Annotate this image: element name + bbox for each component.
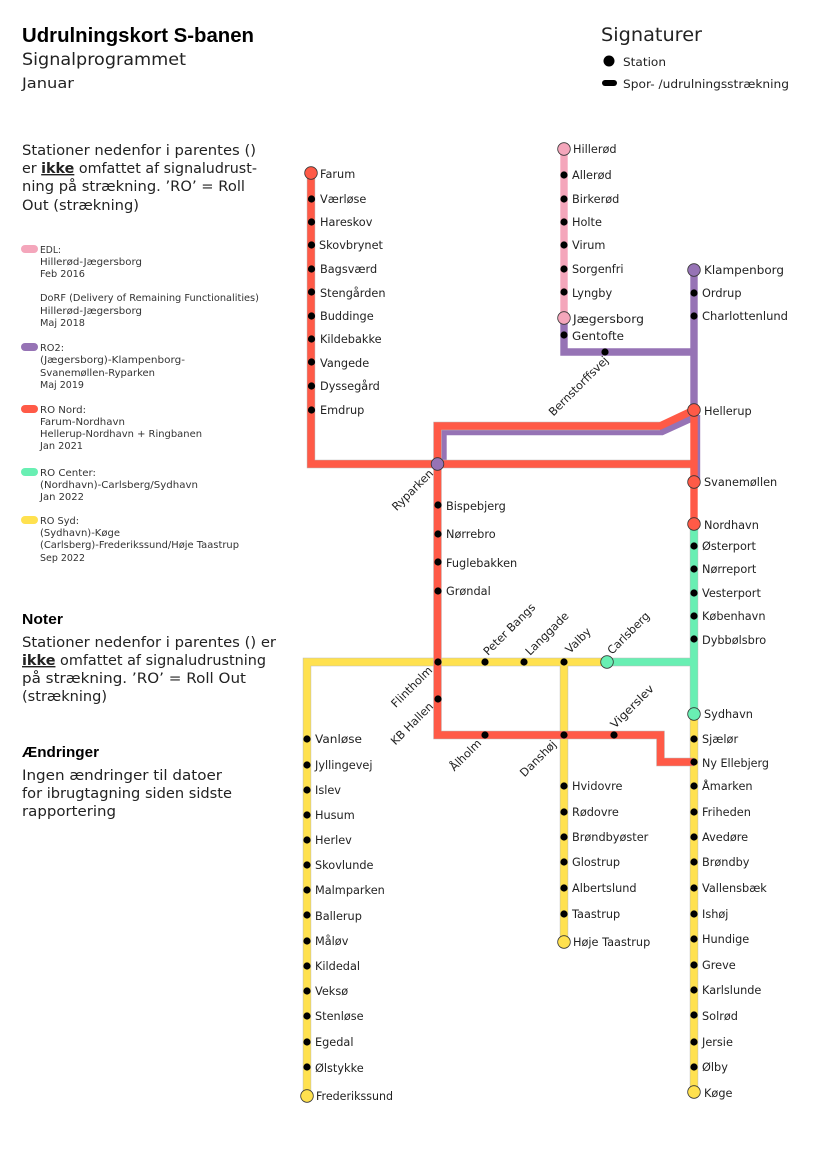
station: Ordrup: Ordrup xyxy=(702,287,741,300)
legend: RO Nord: Hellerup-Nordhavn + Ringbanen xyxy=(40,429,202,440)
changes text: for ibrugtagning siden sidste xyxy=(22,786,232,802)
route map lines xyxy=(307,149,696,1096)
station: Nordhavn: Nordhavn xyxy=(704,519,759,532)
station: Nørreport: Nørreport xyxy=(702,563,757,576)
station: Egedal: Egedal xyxy=(315,1036,354,1049)
station: Ryparken: Ryparken xyxy=(390,467,436,514)
intro text block: Out (strækning) xyxy=(22,198,139,214)
legend: RO Nord: Jan 2021 xyxy=(39,441,83,452)
stations: Høje Taastrup line xyxy=(558,780,650,949)
date: Januar xyxy=(21,76,74,92)
station: Værløse: Værløse xyxy=(320,193,366,206)
stations: Ringbanen xyxy=(388,458,657,780)
icon: track line xyxy=(602,80,617,86)
station: Østerport: Østerport xyxy=(702,540,757,553)
legend: RO Syd: (Carlsberg)-Frederikssund/Høje Taastrup xyxy=(40,540,239,551)
legend: RO Center: RO Center: xyxy=(40,468,96,479)
station: Hvidovre: Hvidovre xyxy=(572,780,622,793)
legend: RO Syd: (Sydhavn)-Køge xyxy=(40,528,120,539)
station: Farum xyxy=(305,167,355,181)
changes text: Ingen ændringer til datoer xyxy=(22,768,222,784)
legend: RO Center: Jan 2022 xyxy=(39,492,84,503)
intro text block: Stationer nedenfor i parentes () xyxy=(22,143,256,159)
station: Rødovre: Rødovre xyxy=(572,806,619,819)
legend: RO2: RO2: xyxy=(40,343,64,354)
station: Vallensbæk: Vallensbæk xyxy=(702,882,767,895)
station: København: København xyxy=(702,610,766,623)
stations: Klampenborg to Køge line xyxy=(688,264,788,1100)
notes text xyxy=(22,635,276,705)
legend: EDL: Hillerød-Jægersborg xyxy=(40,257,142,268)
station: Køge: Køge xyxy=(704,1087,732,1100)
station: Skovbrynet: Skovbrynet xyxy=(319,239,384,252)
station: Birkerød: Birkerød xyxy=(572,193,619,206)
station: Langgade: Langgade xyxy=(523,609,572,658)
legend: RO Syd: RO Syd: xyxy=(40,516,79,527)
station: Farum: Farum xyxy=(320,168,355,181)
station: Allerød: Allerød xyxy=(572,169,612,182)
line: RO Nord red xyxy=(311,173,694,762)
station: Flintholm: Flintholm xyxy=(389,664,435,710)
station: Stenløse: Stenløse xyxy=(315,1010,364,1023)
legend: RO Nord: RO Nord: xyxy=(40,405,86,416)
station: Ishøj xyxy=(690,908,728,921)
station: Valby xyxy=(560,625,594,666)
title: Udrulningskort S-banen xyxy=(22,24,254,47)
station: Sydhavn: Sydhavn xyxy=(704,708,753,721)
station: Islev xyxy=(303,784,341,797)
legend: RO Syd xyxy=(21,516,239,564)
station: Ølstykke: Ølstykke xyxy=(315,1062,364,1075)
station: Frederikssund: Frederikssund xyxy=(316,1090,393,1103)
station: Greve: Greve xyxy=(702,959,736,972)
station: Albertslund: Albertslund xyxy=(572,882,637,895)
station: Fuglebakken: Fuglebakken xyxy=(446,557,517,570)
legend: EDL: Feb 2016 xyxy=(40,269,85,280)
changes text: rapportering xyxy=(22,804,116,820)
legend: RO Syd: Sep 2022 xyxy=(40,553,85,564)
legend: EDL xyxy=(21,245,142,280)
station: Herlev: Herlev xyxy=(315,834,352,847)
station: Skovlunde: Skovlunde xyxy=(315,859,374,872)
station: Lyngby: Lyngby xyxy=(572,287,612,300)
station: Sorgenfri: Sorgenfri xyxy=(572,263,624,276)
station: Buddinge: Buddinge xyxy=(320,310,374,323)
legend: RO2: (Jægersborg)-Klampenborg- xyxy=(40,355,185,366)
legend: RO2 xyxy=(21,343,185,391)
station: Dybbølsbro: Dybbølsbro xyxy=(702,634,766,647)
line: RO Center green xyxy=(607,525,694,714)
station: Nørrebro: Nørrebro xyxy=(446,528,496,541)
stations: Frederikssund line top xyxy=(481,601,652,668)
station: Åmarken: Åmarken xyxy=(702,780,753,793)
station: KB Hallen: KB Hallen xyxy=(388,700,436,748)
station: Hundige: Hundige xyxy=(702,933,749,946)
station: Friheden: Friheden xyxy=(702,806,751,819)
station: Jersie: Jersie xyxy=(701,1036,733,1049)
legend: EDL: EDL: xyxy=(40,245,61,256)
signatures legend: Station xyxy=(623,55,666,69)
station: Ishøj: Ishøj xyxy=(702,908,728,921)
station: Hillerød: Hillerød xyxy=(573,143,617,156)
station: Hellerup: Hellerup xyxy=(704,405,752,418)
station: Carlsberg: Carlsberg xyxy=(605,610,652,657)
station: Jægersborg: Jægersborg xyxy=(572,313,644,326)
station: Sjælør: Sjælør xyxy=(702,733,738,746)
legend: DoRF: Maj 2018 xyxy=(40,318,85,329)
station: Ålholm: Ålholm xyxy=(447,737,484,774)
icon: station dot xyxy=(604,56,614,66)
legend: DoRF: Hillerød-Jægersborg xyxy=(40,306,142,317)
station: Holte: Holte xyxy=(572,216,602,229)
station: Klampenborg: Klampenborg xyxy=(704,264,784,277)
station: Ølby: Ølby xyxy=(702,1061,728,1074)
station: Islev: Islev xyxy=(315,784,341,797)
station: Danshøj: Danshøj xyxy=(517,738,559,780)
station: Jyllingevej: Jyllingevej xyxy=(314,759,372,772)
station: Peter Bangs: Peter Bangs xyxy=(481,601,538,658)
station: Jægersborg xyxy=(558,312,644,326)
station: Charlottenlund: Charlottenlund xyxy=(702,310,788,323)
station: Hareskov: Hareskov xyxy=(320,216,373,229)
signatures legend: Signaturer xyxy=(601,24,702,46)
notes text: Stationer nedenfor i parentes () er xyxy=(22,635,276,651)
station: Gentofte: Gentofte xyxy=(572,330,624,343)
notes text: (strækning) xyxy=(22,689,107,705)
legend: RO Center xyxy=(21,468,198,503)
notes text: ikke omfattet af signaludrustning xyxy=(22,653,266,669)
station: Bagsværd: Bagsværd xyxy=(320,263,377,276)
station: Veksø: Veksø xyxy=(315,985,348,998)
legend: RO2: Maj 2019 xyxy=(40,380,84,391)
station: Avedøre: Avedøre xyxy=(702,831,748,844)
notes heading: Noter xyxy=(22,612,63,628)
station: Glostrup: Glostrup xyxy=(572,856,620,869)
station: Brøndby: Brøndby xyxy=(702,856,750,869)
station: Kildedal: Kildedal xyxy=(315,960,360,973)
station: Malmparken: Malmparken xyxy=(315,884,385,897)
station: Køge xyxy=(688,1086,732,1100)
signatures legend xyxy=(601,24,789,91)
intro text block: er ikke omfattet af signaludrust- xyxy=(22,161,257,177)
subtitle: Signalprogrammet xyxy=(22,50,186,70)
changes text xyxy=(22,768,232,820)
station: Ny Ellebjerg: Ny Ellebjerg xyxy=(702,757,769,770)
station: Stengården: Stengården xyxy=(320,287,386,300)
station: Vanløse: Vanløse xyxy=(315,733,362,746)
notes text: på strækning. ’RO’ = Roll Out xyxy=(22,670,247,687)
stations: Hillerød line xyxy=(546,143,644,419)
station: Brøndbyøster: Brøndbyøster xyxy=(572,831,649,844)
station: Solrød: Solrød xyxy=(702,1010,738,1023)
station: Bernstorffsvej: Bernstorffsvej xyxy=(546,354,611,419)
station: Virum: Virum xyxy=(572,239,605,252)
station: Karlslunde: Karlslunde xyxy=(702,984,761,997)
station: Emdrup: Emdrup xyxy=(320,404,364,417)
station: Vesterport: Vesterport xyxy=(702,587,761,600)
station: Høje Taastrup: Høje Taastrup xyxy=(573,936,650,949)
legend: RO Nord xyxy=(21,405,202,452)
station: Husum: Husum xyxy=(315,809,355,822)
stations: Farum line xyxy=(305,167,386,417)
legend: DoRF xyxy=(40,293,259,329)
stations: Frederikssund line xyxy=(301,733,393,1103)
station: Svanemøllen: Svanemøllen xyxy=(704,476,777,489)
station: Vigerslev: Vigerslev xyxy=(608,682,657,731)
station: Kildebakke: Kildebakke xyxy=(320,333,382,346)
line: RO Syd yellow xyxy=(307,662,694,1096)
legend: DoRF: DoRF (Delivery of Remaining Functionalities) xyxy=(40,293,259,304)
station: Dyssegård: Dyssegård xyxy=(320,380,380,393)
station: Vangede: Vangede xyxy=(320,357,369,370)
station: Hellerup xyxy=(688,404,752,418)
legend: RO Center: (Nordhavn)-Carlsberg/Sydhavn xyxy=(40,480,198,491)
station: Ballerup: Ballerup xyxy=(315,910,362,923)
line: EDL pink xyxy=(560,149,568,318)
station: Taastrup: Taastrup xyxy=(571,908,620,921)
station: Grøndal: Grøndal xyxy=(446,585,491,598)
legend: rollout phases xyxy=(21,245,259,564)
station: Bispebjerg: Bispebjerg xyxy=(446,500,506,513)
line: RO2 purple xyxy=(443,270,696,482)
station: Ølby xyxy=(690,1061,728,1074)
legend: RO Nord: Farum-Nordhavn xyxy=(40,417,125,428)
intro text block xyxy=(22,143,257,214)
intro text block: ning på strækning. ’RO’ = Roll xyxy=(22,178,245,195)
changes heading: Ændringer xyxy=(22,745,99,761)
station: Måløv: Måløv xyxy=(315,935,349,948)
signatures legend: Spor- /udrulningsstrækning xyxy=(623,77,789,91)
station: Valby: Valby xyxy=(563,625,594,656)
legend: RO2: Svanemøllen-Ryparken xyxy=(40,368,155,379)
